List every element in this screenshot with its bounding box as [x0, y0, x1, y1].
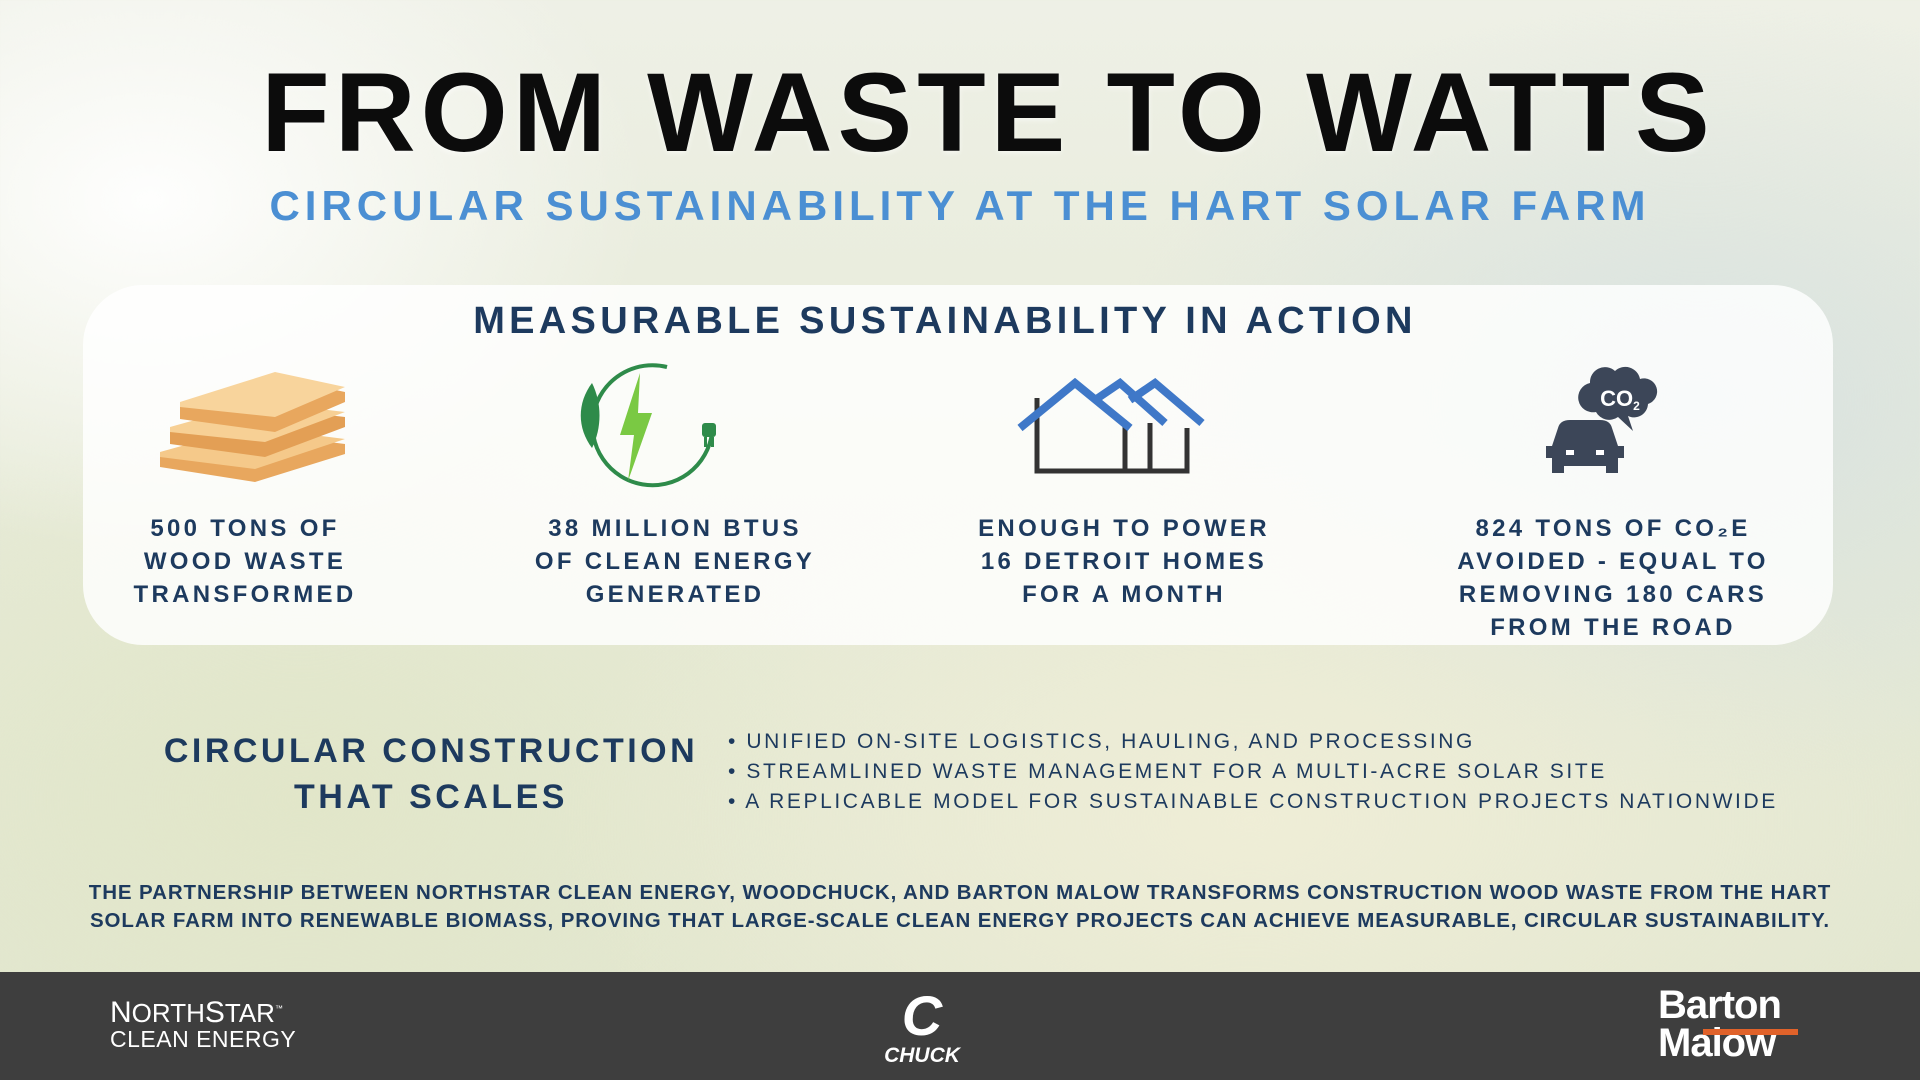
stat: btus: 38 MILLION BTUS — [548, 515, 802, 542]
logo: northstar: CLEAN ENERGY — [110, 1026, 296, 1052]
stat: wood waste: TRANSFORMED — [134, 581, 356, 608]
heading: circular construction — [164, 732, 698, 816]
title: FROM WASTE TO WATTS — [261, 50, 1715, 175]
bottom statement: THE PARTNERSHIP BETWEEN NORTHSTAR CLEAN ENERGY, WOODCHUCK, AND BARTON MALOW TRANSFORMS CONSTRUCTION WOOD WASTE FROM THE HART — [89, 881, 1831, 904]
bottom statement: SOLAR FARM INTO RENEWABLE BIOMASS, PROVING THAT LARGE-SCALE CLEAN ENERGY PROJECTS CAN ACHIEVE MEASURABLE, CIRCULAR SUSTAINABILITY. — [90, 909, 1830, 932]
logo: chuck: C — [902, 984, 942, 1047]
stat: wood waste: WOOD WASTE — [144, 548, 346, 575]
logo: barton malow: Malow — [1658, 1021, 1775, 1065]
panel heading: MEASURABLE SUSTAINABILITY IN ACTION — [473, 300, 1417, 342]
stat: wood waste: 500 TONS OF — [150, 515, 340, 542]
bullet list: • STREAMLINED WASTE MANAGEMENT FOR A MULTI-ACRE SOLAR SITE — [728, 760, 1607, 783]
stat: co2: FROM THE ROAD — [1490, 614, 1736, 641]
bullet list: • A REPLICABLE MODEL FOR SUSTAINABLE CONSTRUCTION PROJECTS NATIONWIDE — [728, 790, 1778, 813]
logo: chuck — [884, 984, 962, 1067]
stat: co2: AVOIDED - EQUAL TO — [1457, 548, 1769, 575]
stat: co2: 824 TONS OF CO₂E — [1475, 515, 1751, 542]
stat: wood waste — [134, 515, 356, 608]
icon: car co2: 2 — [1633, 399, 1640, 413]
stat: btus: OF CLEAN ENERGY — [535, 548, 815, 575]
stat: homes: ENOUGH TO POWER — [978, 515, 1270, 542]
subtitle: CIRCULAR SUSTAINABILITY AT THE HART SOLAR FARM — [269, 182, 1651, 229]
heading: circular construction: CIRCULAR CONSTRUCTION — [164, 732, 698, 770]
logo: barton malow: Barton — [1658, 983, 1781, 1027]
stat: homes — [978, 515, 1270, 608]
heading: circular construction: THAT SCALES — [294, 778, 568, 816]
icon: houses — [1018, 378, 1204, 474]
stat: homes: 16 DETROIT HOMES — [981, 548, 1267, 575]
footer — [0, 972, 1920, 1080]
bottom statement — [88, 881, 1831, 932]
stat: co2 — [1457, 515, 1769, 641]
logo: northstar — [110, 996, 296, 1052]
logo: northstar: NORTHSTAR™ — [110, 996, 283, 1029]
stat: co2: REMOVING 180 CARS — [1459, 581, 1767, 608]
icon: car co2 — [1546, 366, 1658, 473]
stat: btus: GENERATED — [586, 581, 764, 608]
stat: homes: FOR A MONTH — [1022, 581, 1226, 608]
icon: clean energy — [580, 363, 716, 488]
icon: car co2: CO — [1600, 386, 1633, 411]
bullet list — [728, 730, 1778, 813]
panel: measurable sustainability — [83, 285, 1833, 645]
icon: wood planks — [160, 372, 345, 482]
logo: chuck: CHUCK — [884, 1044, 960, 1067]
bullet list: • UNIFIED ON-SITE LOGISTICS, HAULING, AND PROCESSING — [728, 730, 1475, 753]
stat: btus — [535, 515, 815, 608]
logo: barton malow — [1658, 983, 1798, 1065]
